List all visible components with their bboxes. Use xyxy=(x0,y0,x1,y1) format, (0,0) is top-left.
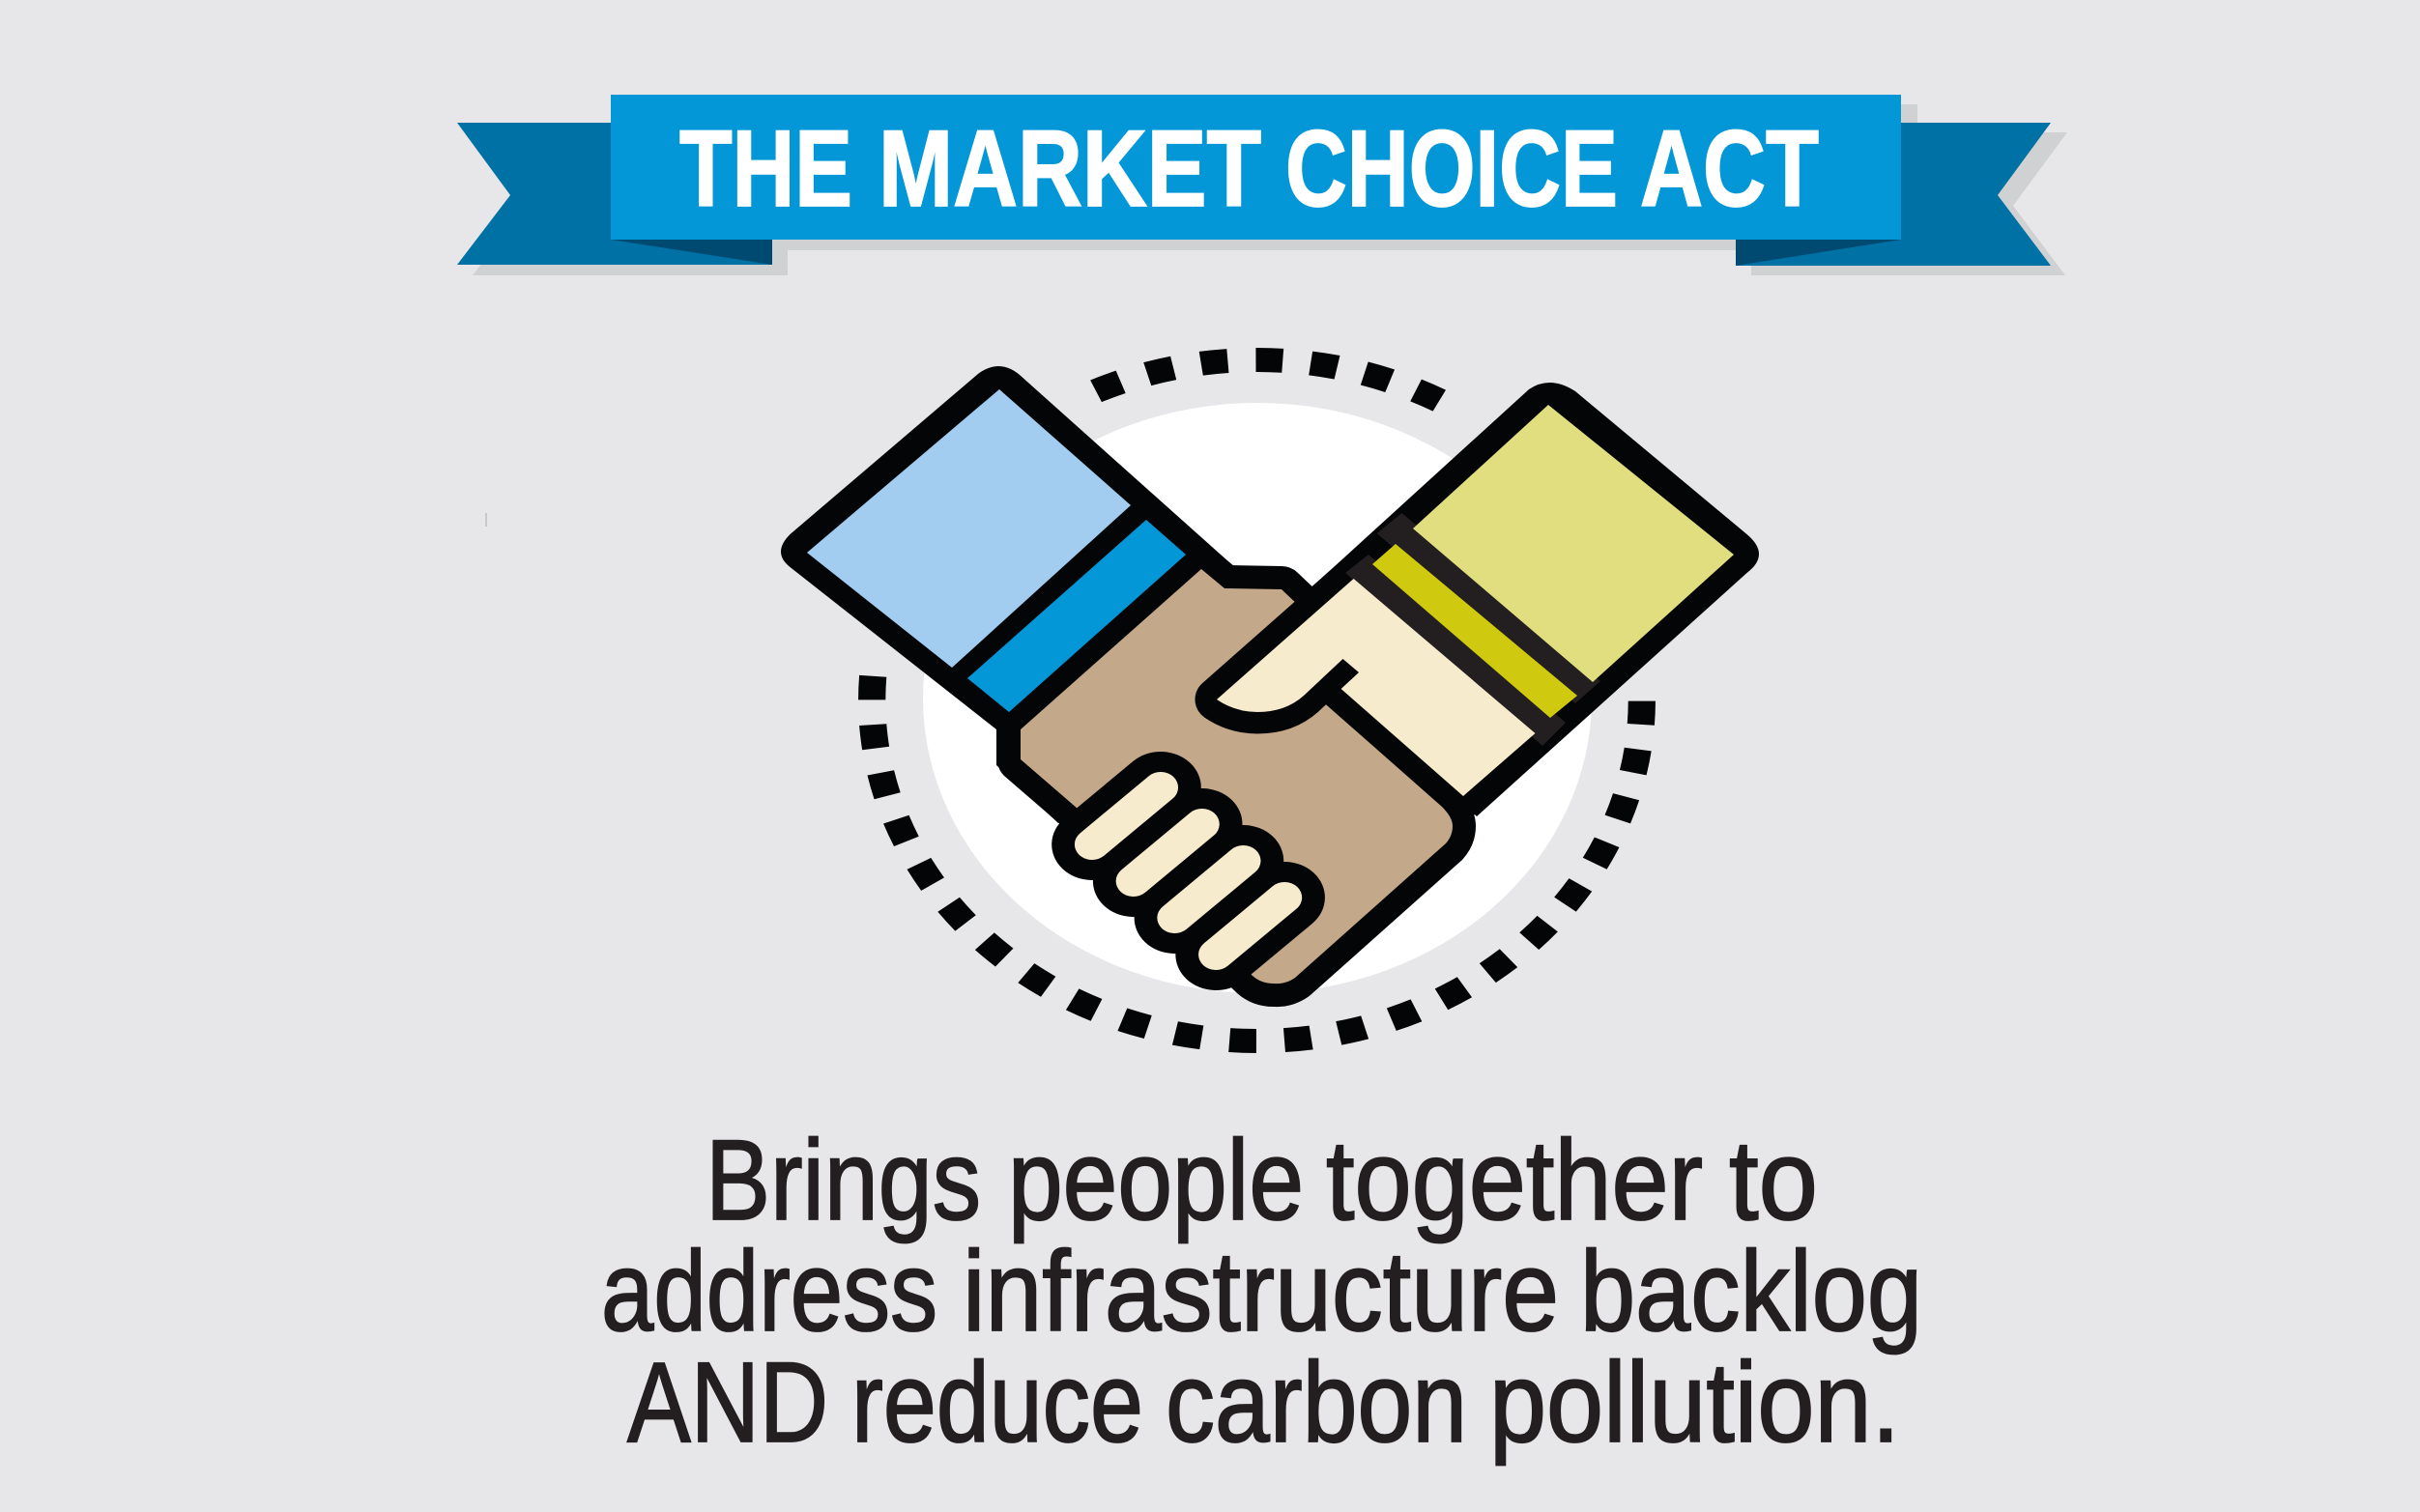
left sleeve xyxy=(807,389,1131,668)
left ribbon tail xyxy=(457,123,772,265)
ribbon centre panel xyxy=(611,95,1901,240)
fingers xyxy=(1092,787,1284,955)
left cuff xyxy=(967,520,1186,712)
right sleeve xyxy=(1413,405,1734,682)
left ribbon fold xyxy=(611,240,772,265)
dotted ring xyxy=(872,360,1642,1041)
caption: carbon xyxy=(1166,1339,1467,1467)
cream hand xyxy=(1217,579,1535,796)
caption: address xyxy=(601,1228,937,1355)
right cuff xyxy=(1372,544,1577,718)
caption: to xyxy=(1729,1117,1818,1244)
title: CHOICE xyxy=(1285,108,1618,229)
caption: backlog xyxy=(1580,1228,1922,1355)
cream hand outline xyxy=(1217,579,1535,796)
caption: reduce xyxy=(851,1339,1143,1467)
caption: together xyxy=(1326,1117,1703,1244)
caption: Brings xyxy=(706,1117,981,1244)
cuff seams xyxy=(1377,513,1600,703)
right ribbon tail xyxy=(1736,123,2051,266)
caption: AND xyxy=(627,1339,828,1467)
title: MARKET xyxy=(879,108,1261,229)
caption: infrastructure xyxy=(963,1228,1559,1355)
right hand: sleeve, cuff and cream hand with thumb xyxy=(1217,383,1759,816)
caption xyxy=(601,1117,1922,1467)
right sleeve outline xyxy=(1312,383,1759,816)
left sleeve and cuff outline xyxy=(781,366,1235,823)
title: THE xyxy=(679,108,852,229)
ribbon shadow xyxy=(473,104,2067,275)
left hand: sleeve, cuff and brown hand xyxy=(781,366,1453,984)
banner: ribbon with title xyxy=(457,95,2067,275)
brown hand xyxy=(1021,569,1453,984)
title: ACT xyxy=(1640,108,1819,229)
title xyxy=(679,108,1819,229)
caption: pollution. xyxy=(1489,1339,1900,1467)
handshake illustration xyxy=(781,360,1759,1041)
caption: people xyxy=(1008,1117,1304,1244)
white circle backdrop xyxy=(923,403,1592,993)
right ribbon fold xyxy=(1736,240,1901,266)
